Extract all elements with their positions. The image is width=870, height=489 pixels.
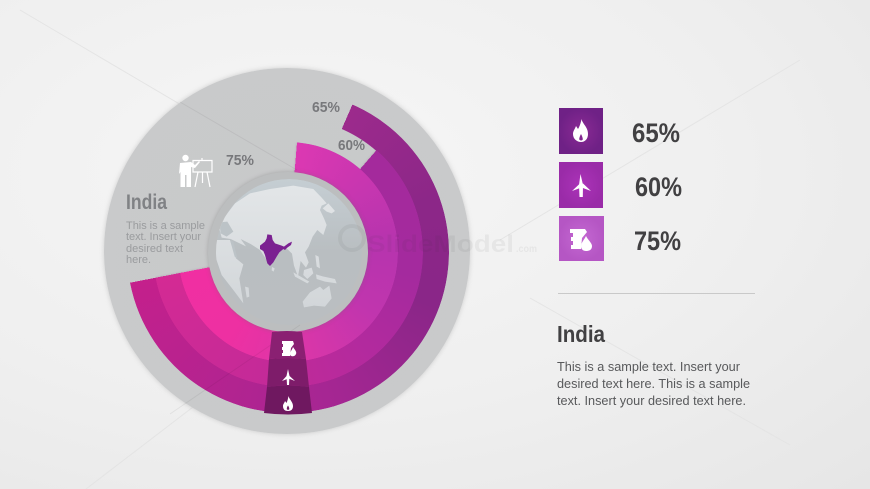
- icon: India map: [260, 234, 292, 266]
- watermark: SlideModel: [367, 231, 514, 258]
- legend: oil 75%: 75%: [634, 226, 681, 256]
- legend: flame 65%: [559, 108, 680, 154]
- label: 60%: 60%: [338, 137, 365, 154]
- watermark: [340, 226, 537, 258]
- panel: grey disc: [104, 68, 470, 434]
- faint lines across disc: [170, 102, 300, 414]
- text block: disc description: text. Insert your: [126, 231, 201, 243]
- heading: India: India: [557, 321, 605, 347]
- label: 75%: 75%: [226, 152, 254, 169]
- icon: turbine on band: [282, 369, 295, 385]
- label: 65%: 65%: [312, 99, 340, 116]
- ring: 75% inner: [178, 142, 398, 362]
- ring: 65% outer: [127, 91, 449, 413]
- text block: disc description: here.: [126, 254, 151, 266]
- icon: barrel on band: [282, 341, 296, 356]
- text block: disc description: desired text: [126, 243, 183, 255]
- watermark: .com: [516, 244, 537, 255]
- legend: oil 75%: [559, 216, 681, 261]
- dark band: [264, 331, 312, 414]
- legend: flame 65%: 65%: [632, 118, 680, 148]
- icon: presenter: [179, 155, 212, 187]
- globe: [216, 179, 356, 308]
- heading: India in disc: India: [126, 191, 167, 214]
- text block: disc description: This is a sample: [126, 220, 205, 232]
- globe surround: [208, 172, 368, 332]
- ring: 60% middle: [156, 150, 423, 386]
- text block: description: [557, 360, 750, 408]
- legend: wind 60%: [559, 162, 682, 208]
- text block: description: desired text here. This is a sample: [557, 377, 750, 391]
- text block: disc description: [126, 220, 205, 266]
- text block: description: This is a sample text. Insert your: [557, 360, 740, 374]
- legend: wind 60%: 60%: [635, 172, 682, 202]
- icon: flame on band: [283, 396, 293, 411]
- text block: description: text. Insert your desired text here.: [557, 394, 746, 408]
